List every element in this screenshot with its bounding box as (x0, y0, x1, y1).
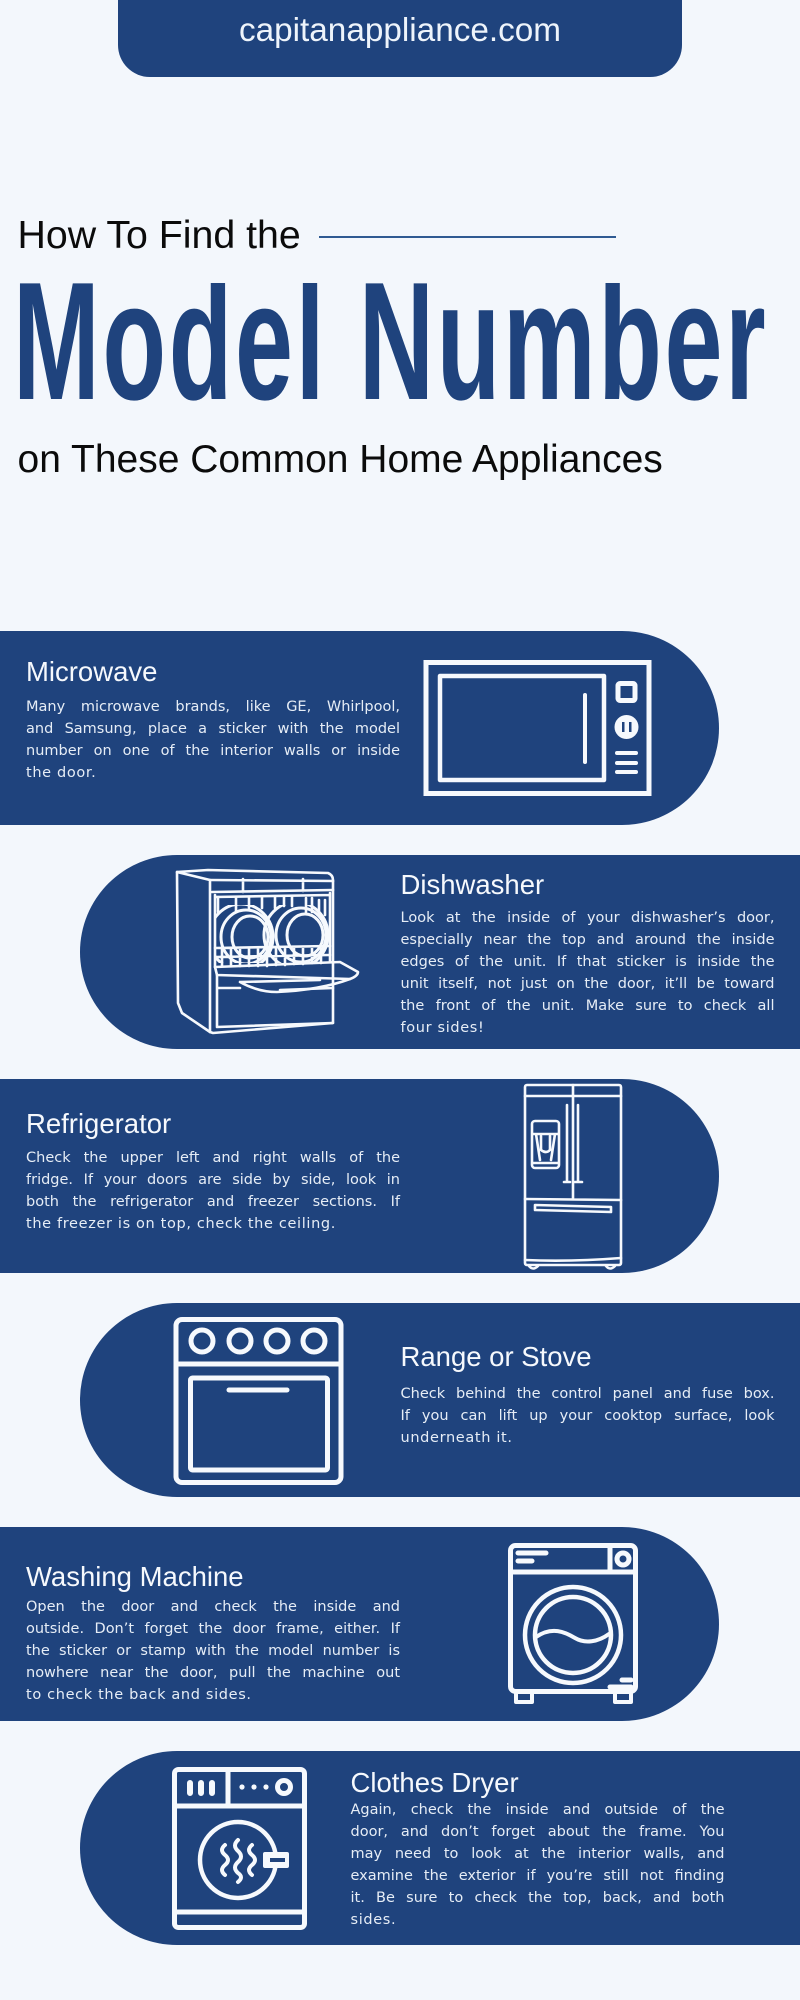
icon: clothes dryer (172, 1767, 307, 1930)
text: microwave: the door. (26, 765, 96, 781)
text: clothes dryer (350, 1802, 724, 1928)
heading: range or stove: Range or Stove (400, 1341, 592, 1372)
title line three: on These Common Home Appliances (18, 438, 663, 481)
text: range or stove (400, 1386, 774, 1446)
text: dishwasher: the front of the unit. Make sure to check all (400, 998, 774, 1014)
panel: refrigerator (0, 1079, 719, 1273)
text: washing machine: nowhere near the door, pull the machine out (26, 1665, 400, 1681)
text: clothes dryer: door, and don’t forget about the frame. You (350, 1824, 724, 1840)
heading: washing machine: Washing Machine (26, 1561, 244, 1592)
panel: clothes dryer (80, 1751, 800, 1945)
text: microwave: number on one of the interior walls or inside (26, 743, 400, 759)
text: clothes dryer: Again, check the inside and outside of the (350, 1802, 724, 1818)
text: washing machine: to check the back and sides. (26, 1687, 252, 1703)
text: dishwasher: especially near the top and around the inside (400, 932, 774, 948)
text: range or stove: Check behind the control panel and fuse box. (400, 1386, 774, 1402)
text: microwave: and Samsung, place a sticker with the model (26, 721, 400, 737)
heading: refrigerator: Refrigerator (26, 1108, 171, 1139)
panel: dishwasher (80, 855, 800, 1049)
icon: dishwasher (176, 868, 360, 1034)
panel: washing machine (0, 1527, 719, 1721)
text: microwave (26, 699, 400, 781)
website address: capitanappliance.com (239, 12, 561, 49)
panel: range or stove (80, 1303, 800, 1497)
text: microwave: Many microwave brands, like GE, Whirlpool, (26, 699, 400, 715)
text: clothes dryer: it. Be sure to check the top, back, and both (350, 1890, 724, 1906)
text: clothes dryer: examine the exterior if you’re still not finding (350, 1868, 724, 1884)
panel: microwave (0, 631, 719, 825)
title line one: How To Find the (18, 213, 301, 257)
text: washing machine: outside. Don’t forget the door frame, either. If (26, 1621, 400, 1637)
title (18, 213, 764, 481)
text: washing machine: the sticker or stamp with the model number is (26, 1643, 400, 1659)
text: clothes dryer: may need to look at the interior walls, and (350, 1846, 724, 1862)
text: dishwasher: edges of the unit. If that sticker is inside the (400, 954, 774, 970)
heading: clothes dryer: Clothes Dryer (350, 1767, 519, 1798)
heading: dishwasher: Dishwasher (400, 869, 544, 900)
text: clothes dryer: sides. (350, 1912, 396, 1928)
text: dishwasher: four sides! (400, 1020, 484, 1036)
text: dishwasher: unit itself, not just on the door, it’ll be toward (400, 976, 774, 992)
text: refrigerator: the freezer is on top, check the ceiling. (26, 1216, 336, 1232)
icon: microwave (424, 660, 652, 796)
website banner (118, 0, 682, 77)
title rule (319, 236, 616, 238)
text: dishwasher (400, 910, 774, 1036)
heading: microwave: Microwave (26, 656, 157, 687)
text: washing machine: Open the door and check the inside and (26, 1599, 400, 1615)
text: washing machine (26, 1599, 400, 1703)
text: refrigerator: both the refrigerator and freezer sections. If (26, 1194, 400, 1210)
icon: stove (174, 1317, 344, 1485)
text: refrigerator: fridge. If your doors are side by side, look in (26, 1172, 400, 1188)
text: refrigerator: Check the upper left and right walls of the (26, 1150, 400, 1166)
text: dishwasher: Look at the inside of your dishwasher’s door, (400, 910, 774, 926)
text: refrigerator (26, 1150, 400, 1232)
icon: refrigerator (524, 1084, 622, 1270)
icon: washing machine (508, 1543, 638, 1704)
text: range or stove: underneath it. (400, 1430, 513, 1446)
text: range or stove: If you can lift up your cooktop surface, look (400, 1408, 774, 1424)
